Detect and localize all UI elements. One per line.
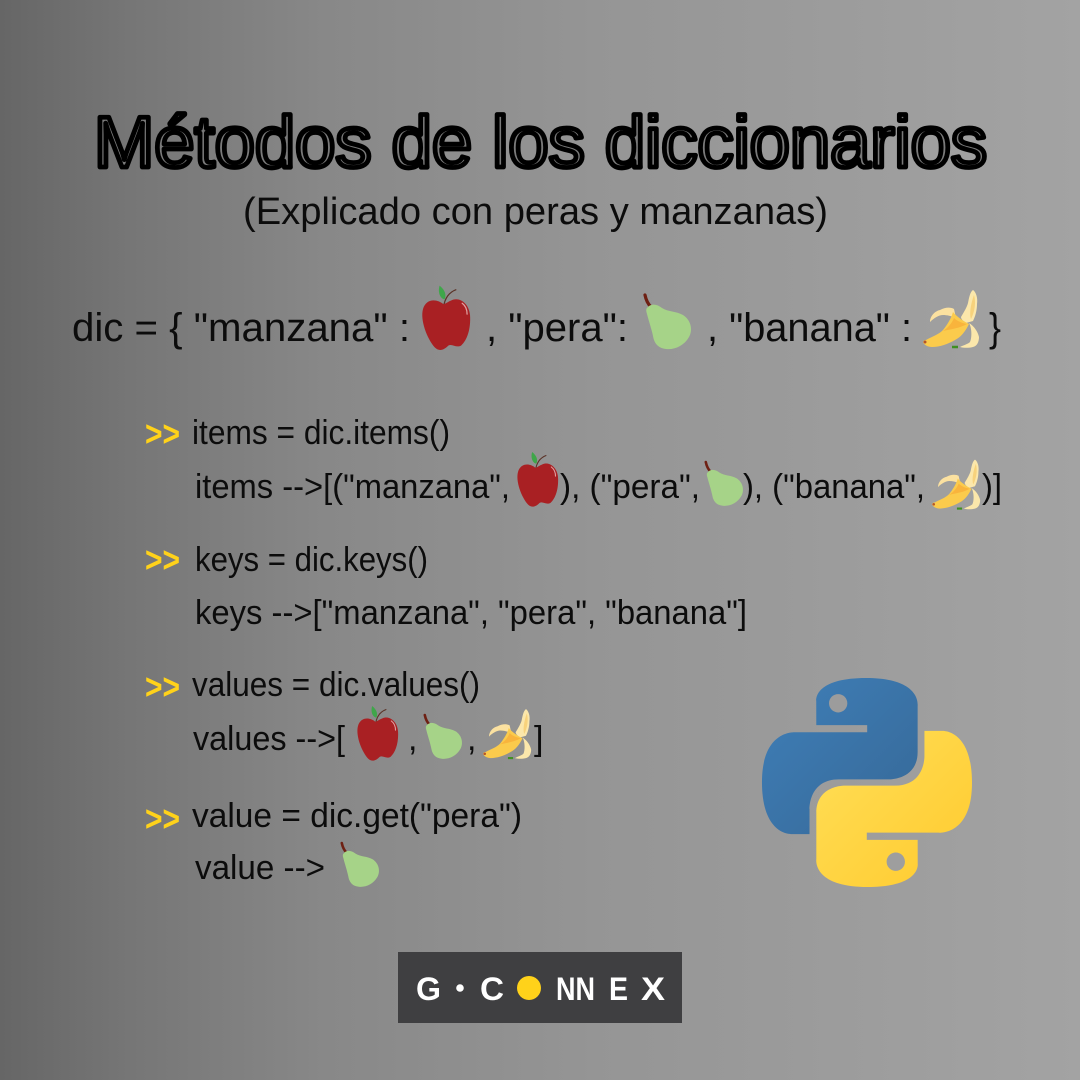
brand logo: G-CONNEX: E [609, 971, 628, 1007]
method: keys: keys -->["manzana", "pera", "banana"] [195, 594, 747, 632]
method: keys: keys = dic.keys() [195, 541, 428, 579]
dictionary definition line: dic = { "manzana" : [72, 306, 410, 350]
method: values: values -->[ [193, 720, 346, 758]
icon: pear [425, 715, 462, 759]
method: values: , [467, 720, 476, 758]
method: keys: >> [145, 539, 180, 580]
dictionary definition line: , "pera": [486, 306, 628, 350]
icon: apple [357, 706, 398, 761]
icon: pear [645, 295, 691, 349]
method: items: ), ("pera", [560, 468, 700, 506]
icon: banana [932, 460, 980, 509]
brand logo: G-CONNEX: C [480, 971, 504, 1007]
icon: python logo [762, 678, 972, 887]
method: items: >> [145, 413, 180, 454]
icon: banana [483, 709, 531, 759]
method: values: >> [145, 666, 180, 707]
method: values: , [408, 720, 417, 758]
subtitle: (Explicado con peras y manzanas) [243, 191, 828, 233]
method: items: )] [982, 468, 1002, 506]
method: get [145, 797, 522, 887]
method: get: >> [145, 798, 180, 839]
brand logo: G-CONNEX: NN [556, 971, 595, 1007]
method: get: value --> [195, 849, 325, 887]
method: items [145, 413, 1002, 509]
brand logo: G-CONNEX [398, 952, 682, 1023]
dictionary definition line [72, 286, 1001, 350]
dictionary definition line: , "banana" : [707, 306, 912, 350]
dictionary definition line: } [989, 306, 1001, 350]
method: keys [145, 539, 747, 632]
method: items: items = dic.items() [192, 414, 450, 452]
icon: pear [706, 462, 743, 506]
method: values [145, 666, 543, 761]
icon: banana [923, 290, 979, 348]
method: items: items -->[("manzana", [195, 468, 510, 506]
method: get: value = dic.get("pera") [192, 797, 522, 835]
icon: apple [517, 452, 558, 507]
method: values: ] [534, 720, 543, 758]
brand logo: G-CONNEX: G [416, 971, 441, 1007]
title: Métodos de los diccionarios [94, 103, 987, 183]
method: values: values = dic.values() [192, 666, 480, 704]
icon: apple [422, 286, 470, 350]
icon: pear [342, 843, 379, 887]
method: items: ), ("banana", [743, 468, 925, 506]
brand logo: G-CONNEX: X [641, 971, 666, 1007]
